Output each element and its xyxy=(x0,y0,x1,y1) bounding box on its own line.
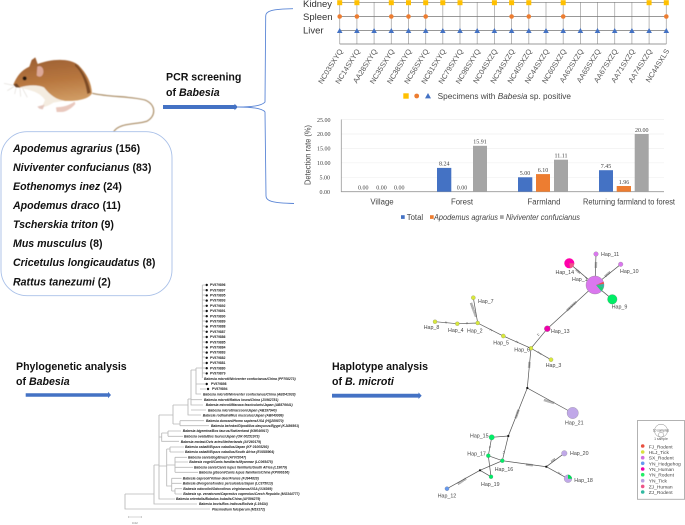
haplotype labels: Hap_4 xyxy=(448,328,464,334)
specimen labels: NC14SXYQ xyxy=(333,47,362,86)
data labels: 5.00 xyxy=(520,171,530,177)
tree reference labels: Babesia canis/Canis lupus familiaris/South Africa (L19079) xyxy=(194,465,288,469)
haplotype labels: Hap_15 xyxy=(470,434,489,440)
category labels: Farmland xyxy=(528,198,560,206)
haplotype labels: Hap_7 xyxy=(478,299,494,305)
network legend xyxy=(638,420,684,499)
data labels: 8.24 xyxy=(439,162,449,168)
legend: HLJ_Tick: HLJ_Tick xyxy=(649,450,669,456)
specimen labels: AA28SXYQ xyxy=(351,47,379,85)
legend: positive specimens: Specimens with Babesia sp. positive xyxy=(438,92,571,101)
Hap_18 wedge xyxy=(568,475,572,479)
tree isolate labels: PV979881 xyxy=(210,361,226,365)
haplotype labels: Hap_11 xyxy=(601,252,619,258)
tree reference labels: Babesia canis/dog/Brazil (AY072047) xyxy=(188,455,247,459)
tree reference labels: Babesia vogeli/Canis familiaris/Myanmar (LC065475) xyxy=(189,460,274,464)
species list panel xyxy=(1,132,172,296)
specimen labels: AA71SXZQ xyxy=(609,47,637,84)
y axis ticks: 20.00 xyxy=(317,132,330,138)
tree isolate labels: PV979895 xyxy=(210,294,226,298)
tree reference labels: Babesia rodhaini/Mus musculus/Japan (AB049999) xyxy=(203,413,284,417)
Hap_14 node xyxy=(564,258,574,268)
tree isolate labels: PV979897 xyxy=(210,288,226,292)
tree reference labels: Babesia microti/Rattus losea/China (JX962781) xyxy=(204,398,279,402)
tree isolate labels: PV979880 xyxy=(210,366,226,370)
bracket linking to charts xyxy=(238,9,294,204)
y axis ticks: 0.00 xyxy=(320,190,330,196)
haplotype labels xyxy=(424,252,639,499)
haplotype labels: Hap_3 xyxy=(546,363,561,369)
y axis ticks xyxy=(317,118,330,196)
bars: Apodemus agrarius xyxy=(536,174,631,192)
specimen labels: NC34SXZQ xyxy=(488,47,517,85)
tree scale bar: 0.02 xyxy=(132,521,138,525)
tree reference labels: Babesia divergens/Ixodes persulcatus/Japan (LC375013) xyxy=(183,481,274,485)
specimen labels: NC98SXYQ xyxy=(454,47,482,86)
legend: ZJ_Rodent: ZJ_Rodent xyxy=(649,490,673,496)
specimen labels: AA67SXZQ xyxy=(592,47,620,84)
specimen labels: NC03SXYQ xyxy=(316,47,345,86)
phylogenetic tree xyxy=(125,283,300,525)
tree scale bar xyxy=(128,516,142,525)
specimen labels: NC61SXYQ xyxy=(419,47,448,86)
tree isolate labels: PV979887 xyxy=(210,330,226,334)
haplotype labels: Hap_10 xyxy=(620,269,639,275)
species: Apodemus draco: Apodemus draco (11) xyxy=(12,200,121,212)
tree reference labels: Babesia motasi/Ovis aries/Netherlands (AY260179) xyxy=(181,440,262,444)
species: Mus musculus: Mus musculus (8) xyxy=(13,238,102,250)
legend: YN_Rodent: YN_Rodent xyxy=(649,473,675,479)
legend: ZJ_Human: ZJ_Human xyxy=(649,484,673,490)
tree reference labels: Babesia capreoli/Yellow deer/France (FJ944828) xyxy=(183,476,260,480)
sample size key: 1 sample xyxy=(654,437,668,441)
specimen labels: AA62SXZQ xyxy=(558,47,586,84)
haplotype labels: Hap_2 xyxy=(467,329,483,335)
tree leaf markers xyxy=(206,284,209,390)
haplotype labels: Hap_12 xyxy=(438,493,456,499)
tree isolate labels: PV979890 xyxy=(210,314,226,318)
species: Niviventer confucianus: Niviventer confucianus (83) xyxy=(13,162,151,174)
heading: Phylogenetic analysis: of Babesia xyxy=(16,376,70,388)
data labels xyxy=(358,128,648,192)
data labels: 6.10 xyxy=(538,168,548,174)
tree reference labels: Babesia odocoilei/Odocoileus virginianus/USA (U16369) xyxy=(183,487,273,491)
heading: PCR screening xyxy=(166,72,241,99)
liver markers xyxy=(337,28,669,33)
y axis ticks: 5.00 xyxy=(320,176,330,182)
legend: SX_Rodent: SX_Rodent xyxy=(649,456,674,462)
tree branches xyxy=(125,285,210,509)
haplotype labels: Hap_14 xyxy=(556,270,574,276)
bar chart legend: Total xyxy=(407,213,423,222)
sample size key: 10 samples xyxy=(653,428,670,432)
legend: YN_Tick: YN_Tick xyxy=(649,479,668,485)
tree isolate labels: PV979892 xyxy=(210,304,226,308)
species: Rattus tanezumi: Rattus tanezumi (2) xyxy=(13,276,111,288)
data labels: 11.11 xyxy=(554,154,568,160)
haplotype labels: Hap_8 xyxy=(424,325,439,331)
specimen labels: NC44SXZQ xyxy=(523,47,551,85)
tree isolate labels: PV979889 xyxy=(210,320,226,324)
haplotype labels: Hap_1 xyxy=(572,277,588,283)
tree isolate labels: PV979894 xyxy=(212,387,228,391)
tree reference labels: Babesia sp. venatorum/Capreolus capreolus/Czech Republic (MG344777) xyxy=(183,492,300,496)
haplotype labels: Hap_17 xyxy=(467,452,486,458)
tree reference labels: Babesia caballi/Equus caballus/South Africa (EU888904) xyxy=(185,450,275,454)
tree reference labels: Babesia microti/Macaca fascicularis/Japan (AB576641) xyxy=(206,403,294,407)
tree reference labels xyxy=(176,377,300,511)
specimen labels: NC44SXLS xyxy=(644,47,671,84)
tree isolate labels: PV979884 xyxy=(210,346,226,350)
arrow: haplotype analysis xyxy=(332,392,422,399)
spleen markers xyxy=(337,14,669,19)
bar chart legend xyxy=(401,213,580,222)
tree isolate labels: PV979891 xyxy=(210,309,226,313)
data labels: 0.00 xyxy=(394,186,405,192)
tree isolate labels: PV979896 xyxy=(210,283,226,287)
legend: YN_Human: YN_Human xyxy=(649,467,674,473)
specimen labels: NC40SXZQ xyxy=(505,47,534,85)
legend: YN_Hedgehog: YN_Hedgehog xyxy=(649,461,681,467)
arrow: PCR screening xyxy=(163,104,238,110)
haplotype labels: Hap_19 xyxy=(481,482,500,488)
specimen labels: NC60SXZQ xyxy=(540,47,568,85)
data labels: 20.00 xyxy=(635,128,648,134)
other haplotype nodes xyxy=(433,252,623,491)
tree reference labels: Babesia bovis/Bos indicus/Bolivia (L19434) xyxy=(199,502,269,506)
legend: FJ_Rodent: FJ_Rodent xyxy=(649,444,673,450)
y axis ticks: 25.00 xyxy=(317,118,330,124)
sample size key xyxy=(653,424,670,441)
y axis ticks: 10.00 xyxy=(317,161,330,167)
tree reference labels: Babesia microti/raccoon/Japan (AB197940) xyxy=(208,408,277,412)
specimen labels: NC56SXYQ xyxy=(402,47,431,86)
heading: Haplotype analysis: Haplotype analysis xyxy=(332,361,428,373)
tree reference labels: Babesia behnkei/Dipodillus dasyurus/Egypt (KJ486561) xyxy=(211,424,300,428)
species: Eothenomys inez: Eothenomys inez (24) xyxy=(13,181,122,193)
network junction nodes xyxy=(479,387,547,471)
heading: Haplotype analysis xyxy=(332,361,428,388)
data labels: 7.45 xyxy=(601,164,611,170)
tree reference labels: Babesia caballi/Equus caballus/Japan (KF 01005293) xyxy=(185,445,270,449)
specimen labels: AA65SXZQ xyxy=(575,47,603,84)
haplotype labels: Hap_18 xyxy=(574,478,593,484)
specimen labels: AA74SXZQ xyxy=(626,47,654,84)
tree isolate labels: PV979885 xyxy=(210,340,226,344)
haplotype network xyxy=(424,252,639,499)
tree reference labels: Babesia gibsoni/Canis lupus familiaris/China (KP666166) xyxy=(199,470,290,474)
species: Cricetulus longicaudatus: Cricetulus longicaudatus (8) xyxy=(13,257,155,269)
haplotype labels: Hap_20 xyxy=(570,451,589,457)
tree reference labels: Babesia orientalis/Bubalus bubalis/China (AY596279) xyxy=(176,497,261,501)
species: Apodemus agrarius: Apodemus agrarius (156) xyxy=(12,143,140,155)
tree isolate labels xyxy=(210,283,228,391)
Hap_1 node xyxy=(586,276,604,294)
heading: Phylogenetic analysis xyxy=(16,361,127,388)
data labels: 1.96 xyxy=(619,180,629,186)
bars: Niviventer confucianus xyxy=(473,134,649,192)
kidney markers xyxy=(337,0,669,5)
tree isolate labels: PV979898 xyxy=(211,382,227,386)
network edges xyxy=(435,254,621,489)
network mutation hatches xyxy=(458,262,610,484)
heading: Phylogenetic analysis: Phylogenetic analysis xyxy=(16,361,127,373)
arrow: phylogenetic analysis xyxy=(26,392,111,398)
species: Tscherskia triton: Tscherskia triton (9) xyxy=(13,219,114,231)
chart: positive specimens by organ xyxy=(303,0,671,101)
haplotype labels: Hap_16 xyxy=(495,467,513,473)
tree reference labels: Babesia ovata/Bos taurus/Japan (OR 00251973) xyxy=(184,434,260,438)
specimen labels: NC04SXZQ xyxy=(471,47,500,85)
specimen labels: NC79SXYQ xyxy=(436,47,465,86)
haplotype labels: Hap_21 xyxy=(565,421,584,427)
bar chart legend: Niviventer confucianus xyxy=(506,213,580,222)
category labels xyxy=(370,198,676,206)
data labels: 0.00 xyxy=(376,186,387,192)
y axis ticks: 15.00 xyxy=(317,147,330,153)
data labels: 0.00 xyxy=(457,186,467,192)
chart: detection rate bar chart xyxy=(304,118,676,222)
haplotype labels: Hap_6 xyxy=(514,347,530,353)
organ labels: Liver xyxy=(303,26,324,36)
specimen labels: NC35SXYQ xyxy=(368,47,396,86)
tree isolate labels: PV979888 xyxy=(210,325,226,329)
y axis title: Detection rate (%) xyxy=(304,125,312,185)
specimen labels xyxy=(316,47,671,86)
organ labels: Spleen xyxy=(303,12,333,23)
tree isolate labels: PV979883 xyxy=(210,351,226,355)
tree reference labels: Babesia duncani/Homo sapiens/USA (HQ289870) xyxy=(206,419,284,423)
haplotype labels: Hap_5 xyxy=(493,340,509,346)
heading: PCR screening: of Babesia xyxy=(166,87,220,99)
data labels: 0.00 xyxy=(358,186,369,192)
specimen labels: NC38SXYQ xyxy=(385,47,414,86)
haplotype labels: Hap_9 xyxy=(612,305,627,311)
category labels: Returning farmland to forest xyxy=(583,198,676,206)
bar chart legend: Apodemus agrarius xyxy=(433,213,498,222)
tree isolate labels: PV979879 xyxy=(210,372,226,376)
tree reference labels: Babesia microti/Niviventer confucianus/China (ABD41633) xyxy=(203,392,296,396)
category labels: Village xyxy=(370,198,394,206)
tree isolate labels: PV979886 xyxy=(210,335,226,339)
heading: Haplotype analysis: of B. microti xyxy=(332,376,395,388)
bars: total xyxy=(437,168,613,192)
tree isolate labels: PV979893 xyxy=(210,299,226,303)
data labels: 15.91 xyxy=(473,140,487,146)
organ labels xyxy=(303,0,333,36)
tree isolate labels: PV979882 xyxy=(210,356,226,360)
tree reference labels: Plasmodium falciparum (M19172) xyxy=(212,507,266,511)
category labels: Forest xyxy=(451,198,474,206)
tree reference labels: Babesia bigemina/Bos taurus/Switzerland (KM046917) xyxy=(183,429,269,433)
icon: brown field mouse xyxy=(4,57,154,132)
haplotype labels: Hap_13 xyxy=(551,329,570,335)
tree reference labels: Babesia microti/Niviventer confucianus/China (PP708273) xyxy=(204,377,297,381)
heading: PCR screening: PCR screening xyxy=(166,72,241,84)
